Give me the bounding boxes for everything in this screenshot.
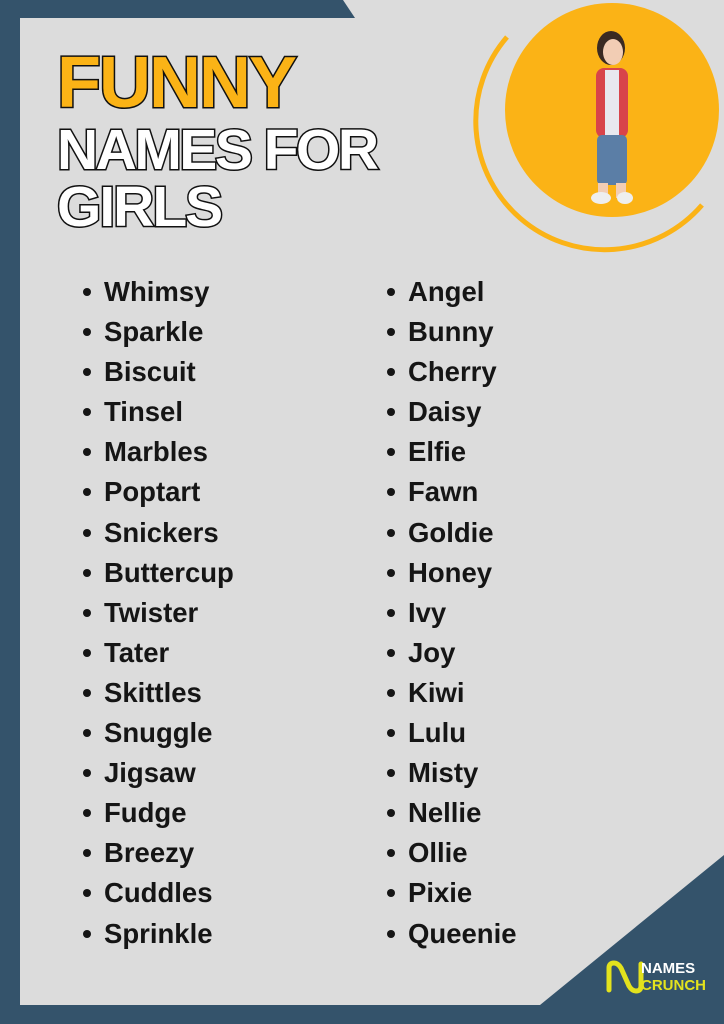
list: left column: Biscuit	[104, 356, 196, 387]
list: left column: Cuddles	[104, 877, 212, 908]
list: right column: Kiwi	[408, 677, 465, 708]
list: right column: Fawn	[408, 476, 478, 507]
list: left column: Sparkle	[104, 316, 203, 347]
list: left column: Marbles	[104, 436, 208, 467]
list: right column: Bunny	[408, 316, 494, 347]
list: right column: Lulu	[408, 717, 466, 748]
list: left column: Skittles	[104, 677, 202, 708]
list: right column: Honey	[408, 557, 492, 588]
list: left column: Sprinkle	[104, 918, 213, 948]
list: right column: Elfie	[408, 436, 466, 467]
illustration: girl in yellow circle	[473, 3, 719, 252]
list: right column: Misty	[408, 757, 478, 788]
list: right column: Queenie	[408, 918, 517, 948]
list: right column: Daisy	[408, 396, 481, 427]
title: FUNNY	[57, 43, 295, 123]
list: right column	[387, 276, 517, 948]
title: NAMES FOR	[57, 118, 376, 182]
list: right column: Ivy	[408, 597, 446, 628]
list: right column: Goldie	[408, 517, 494, 548]
logo	[606, 960, 706, 994]
list: left column: Jigsaw	[104, 757, 196, 788]
list: right column: Joy	[408, 637, 455, 668]
list: left column: Breezy	[104, 837, 194, 868]
list: left column: Snickers	[104, 517, 219, 548]
list: left column: Tater	[104, 637, 169, 668]
list: right column: Pixie	[408, 877, 472, 908]
title	[57, 43, 380, 239]
list: left column	[83, 276, 234, 949]
list: left column: Fudge	[104, 797, 186, 828]
logo: NAMES	[641, 960, 695, 977]
list: left column: Twister	[104, 597, 198, 628]
list: right column: Cherry	[408, 356, 497, 387]
logo: CRUNCH	[641, 977, 706, 994]
list: left column: Snuggle	[104, 717, 212, 748]
list: left column: Buttercup	[104, 557, 234, 588]
list: right column: Angel	[408, 276, 484, 307]
list: left column: Tinsel	[104, 396, 183, 427]
list: left column: Whimsy	[104, 276, 209, 307]
list: left column: Poptart	[104, 476, 200, 507]
list: right column: Nellie	[408, 797, 481, 828]
title: GIRLS	[57, 175, 221, 239]
list: right column: Ollie	[408, 837, 468, 868]
